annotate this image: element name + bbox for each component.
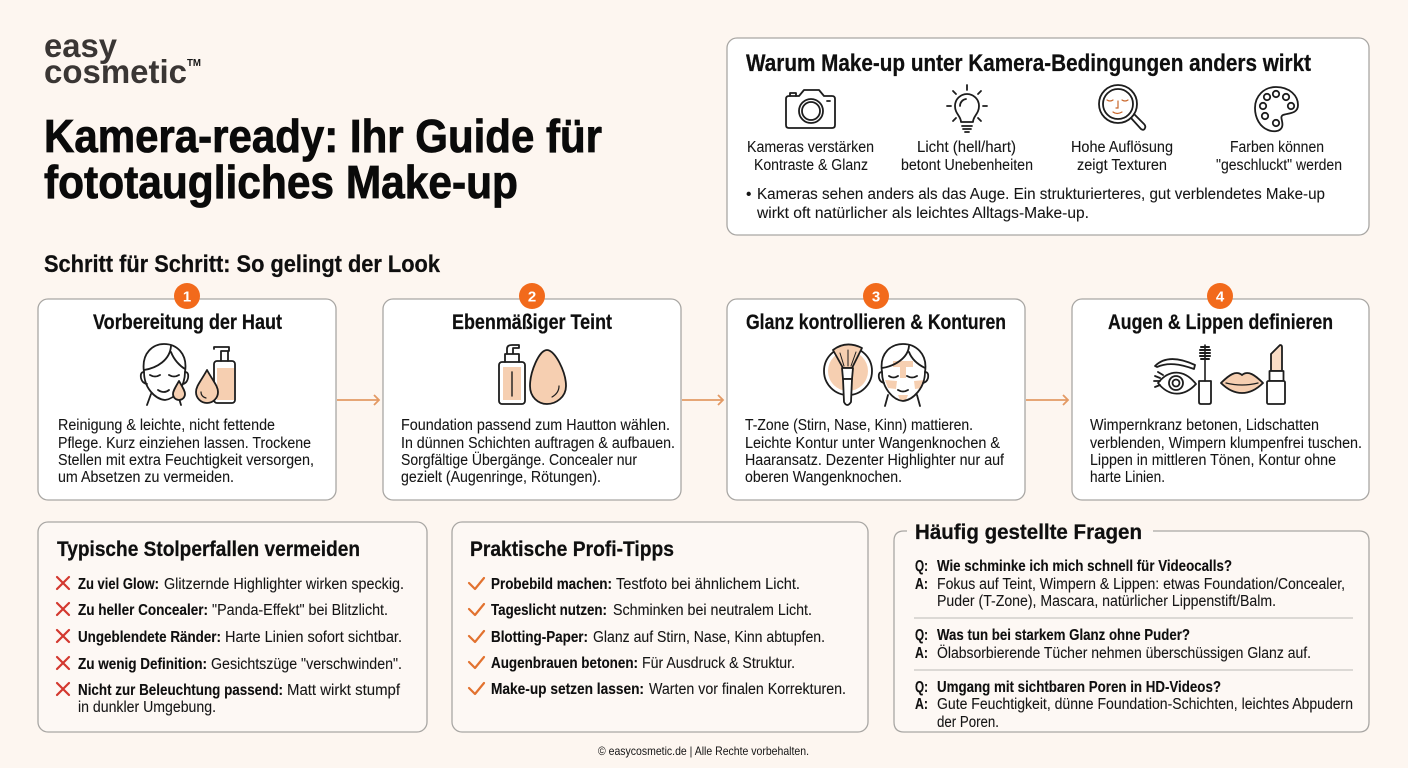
tip 3: Blotting-Paper: <box>491 629 588 646</box>
icon: foundation bottle and sponge <box>499 345 566 404</box>
caption: colours: "geschluckt" werden <box>1216 157 1342 174</box>
step 4 heading: Augen & Lippen definieren <box>1108 311 1333 334</box>
badge 2: 2 <box>528 288 536 306</box>
pitfall 1: Zu viel Glow: <box>78 576 159 593</box>
step 4 text: harte Linien. <box>1090 469 1165 486</box>
step 1 text: Stellen mit extra Feuchtigkeit versorgen, <box>58 452 314 469</box>
step 4 text: verblenden, Wimpern klumpenfrei tuschen. <box>1090 435 1362 452</box>
pitfall 3: Harte Linien sofort sichtbar. <box>225 629 402 646</box>
pitfall 2: "Panda-Effekt" bei Blitzlicht. <box>212 602 388 619</box>
caption: light <box>901 139 1033 174</box>
FAQ item 1: Puder (T-Zone), Mascara, natürlicher Lippenstift/Balm. <box>937 593 1276 610</box>
tip 5 <box>469 681 846 698</box>
tip 1 <box>469 576 800 593</box>
step 1 text: Reinigung & leichte, nicht fettende <box>58 417 275 434</box>
tip 2 <box>469 602 812 619</box>
title <box>44 110 602 208</box>
pitfall 5: in dunkler Umgebung. <box>78 699 216 716</box>
pitfall 2 <box>57 602 388 619</box>
panel: FAQ <box>894 521 1369 732</box>
section heading: steps: Schritt für Schritt: So gelingt der Look <box>44 251 441 278</box>
title: fototaugliches Make-up <box>44 156 518 208</box>
FAQ item 1: A: <box>915 576 928 593</box>
icon: face, drop and lotion bottle <box>141 344 235 405</box>
footer: © easycosmetic.de | Alle Rechte vorbehalten. <box>598 744 809 758</box>
caption: light: Licht (hell/hart) <box>917 139 1016 156</box>
tips heading: Praktische Profi-Tipps <box>470 538 674 561</box>
arrow 3 to 4 <box>1026 395 1068 405</box>
FAQ item 2 <box>915 627 1311 662</box>
pitfall 1: Glitzernde Highlighter wirken speckig. <box>164 576 404 593</box>
step 4 text <box>1090 417 1362 486</box>
panel heading: Warum Make-up unter Kamera-Bedingungen anders wirkt <box>746 50 1311 77</box>
icon: camera <box>786 90 835 128</box>
icon: eye, mascara, lips, lipstick <box>1154 345 1285 404</box>
tip 4 <box>469 655 795 672</box>
FAQ heading: Häufig gestellte Fragen <box>915 521 1142 544</box>
pitfall 5: Nicht zur Beleuchtung passend: <box>78 682 283 699</box>
FAQ item 1: Wie schminke ich mich schnell für Videocalls? <box>937 558 1232 575</box>
tip 2: Tageslicht nutzen: <box>491 602 607 619</box>
caption: colours <box>1216 139 1342 174</box>
step 1 text: um Absetzen zu vermeiden. <box>58 469 234 486</box>
badge 3 <box>863 283 889 309</box>
icon: magnifier with face <box>1099 85 1145 130</box>
tip 5: Warten vor finalen Korrekturen. <box>649 681 846 698</box>
pitfall 4: Zu wenig Definition: <box>78 656 207 673</box>
badge 4 <box>1207 283 1233 309</box>
step 1 heading: Vorbereitung der Haut <box>93 311 282 334</box>
FAQ item 3: Gute Feuchtigkeit, dünne Foundation-Schichten, leichtes Abpudern <box>937 696 1353 713</box>
bullet note <box>746 186 1325 222</box>
step 3 text: oberen Wangenknochen. <box>745 469 902 486</box>
FAQ item 2: Was tun bei starkem Glanz ohne Puder? <box>937 627 1190 644</box>
step 1 text: Pflege. Kurz einziehen lassen. Trockene <box>58 435 311 452</box>
FAQ item 2: Q: <box>915 627 928 644</box>
FAQ item 1 <box>915 558 1345 610</box>
pitfall 3: Ungeblendete Ränder: <box>78 629 221 646</box>
FAQ item 2: A: <box>915 645 928 662</box>
caption: resolution: zeigt Texturen <box>1077 157 1167 174</box>
FAQ item 3: Q: <box>915 679 928 696</box>
icon: light bulb <box>947 85 987 132</box>
FAQ item 3: A: <box>915 696 928 713</box>
logo: easy <box>44 27 118 64</box>
icon: brush and powder <box>824 344 872 405</box>
title: Kamera-ready: Ihr Guide für <box>44 110 602 162</box>
badge 4: 4 <box>1216 288 1225 306</box>
logo: cosmetic <box>44 53 187 90</box>
bullet note: wirkt oft natürlicher als leichtes Alltags-Make-up. <box>756 205 1089 222</box>
icon: palette <box>1255 87 1298 131</box>
FAQ item 2: Ölabsorbierende Tücher nehmen überschüssigen Glanz auf. <box>937 644 1311 662</box>
logo <box>44 27 201 90</box>
step 4 text: Lippen in mittleren Tönen, Kontur ohne <box>1090 452 1336 469</box>
tip 3 <box>469 629 825 646</box>
step 4 text: Wimpernkranz betonen, Lidschatten <box>1090 417 1319 434</box>
step 2 text: gezielt (Augenringe, Rötungen). <box>401 469 601 486</box>
caption: light: betont Unebenheiten <box>901 157 1033 174</box>
arrow 1 to 2 <box>337 395 379 405</box>
badge 2 <box>519 283 545 309</box>
step 1 text <box>58 417 314 486</box>
caption: resolution <box>1071 139 1173 174</box>
panel: pro tips <box>452 522 868 732</box>
pitfall 3 <box>57 629 402 646</box>
badge 1: 1 <box>183 288 191 306</box>
panel: pitfalls <box>38 522 427 732</box>
step 2 text: In dünnen Schichten auftragen & aufbauen. <box>401 435 675 452</box>
tip 1: Testfoto bei ähnlichem Licht. <box>616 576 800 593</box>
arrow 2 to 3 <box>682 395 723 405</box>
caption: resolution: Hohe Auflösung <box>1071 139 1173 156</box>
step 3 text: Leichte Kontur unter Wangenknochen & <box>745 435 1001 452</box>
FAQ item 1: Q: <box>915 558 928 575</box>
caption: camera <box>747 139 874 174</box>
step 3 card <box>727 283 1025 500</box>
tip 4: Augenbrauen betonen: <box>491 655 638 672</box>
pitfall 5: Matt wirkt stumpf <box>287 682 401 699</box>
panel: why make-up looks different on camera <box>727 38 1369 235</box>
pitfall 5 <box>57 682 401 716</box>
pitfalls heading: Typische Stolperfallen vermeiden <box>57 538 360 561</box>
logo: TM <box>187 58 201 69</box>
step 4 card <box>1072 283 1369 500</box>
step 2 card <box>383 283 681 500</box>
bullet note: • <box>746 186 751 203</box>
FAQ item 3 <box>915 679 1353 731</box>
step 2 text: Foundation passend zum Hautton wählen. <box>401 417 670 434</box>
step 2 heading: Ebenmäßiger Teint <box>452 311 612 334</box>
step 3 text <box>745 417 1005 486</box>
tip 1: Probebild machen: <box>491 576 612 593</box>
bullet note: Kameras sehen anders als das Auge. Ein strukturierteres, gut verblendetes Make-up <box>757 186 1325 203</box>
badge 3: 3 <box>872 288 880 306</box>
FAQ item 3: der Poren. <box>937 714 999 731</box>
tip 4: Für Ausdruck & Struktur. <box>642 655 795 672</box>
caption: camera: Kontraste & Glanz <box>754 157 868 174</box>
step 3 heading: Glanz kontrollieren & Konturen <box>746 311 1006 334</box>
pitfall 4 <box>57 656 402 673</box>
step 3 text: T-Zone (Stirn, Nase, Kinn) mattieren. <box>745 417 973 434</box>
badge 1 <box>174 283 200 309</box>
pitfall 2: Zu heller Concealer: <box>78 602 208 619</box>
tip 2: Schminken bei neutralem Licht. <box>613 602 812 619</box>
FAQ item 3: Umgang mit sichtbaren Poren in HD-Videos? <box>937 679 1221 696</box>
pitfall 4: Gesichtszüge "verschwinden". <box>211 656 402 673</box>
step 2 text <box>401 417 675 486</box>
step 3 text: Haaransatz. Dezenter Highlighter nur auf <box>745 452 1005 469</box>
caption: camera: Kameras verstärken <box>747 139 874 156</box>
caption: colours: Farben können <box>1230 139 1324 156</box>
tip 5: Make-up setzen lassen: <box>491 681 644 698</box>
tip 3: Glanz auf Stirn, Nase, Kinn abtupfen. <box>593 629 825 646</box>
icon: face with contour zones <box>879 344 928 406</box>
step 2 text: Sorgfältige Übergänge. Concealer nur <box>401 451 637 469</box>
FAQ item 1: Fokus auf Teint, Wimpern & Lippen: etwas Foundation/Concealer, <box>937 576 1345 593</box>
step 1 card <box>38 283 336 500</box>
pitfall 1 <box>57 576 404 593</box>
